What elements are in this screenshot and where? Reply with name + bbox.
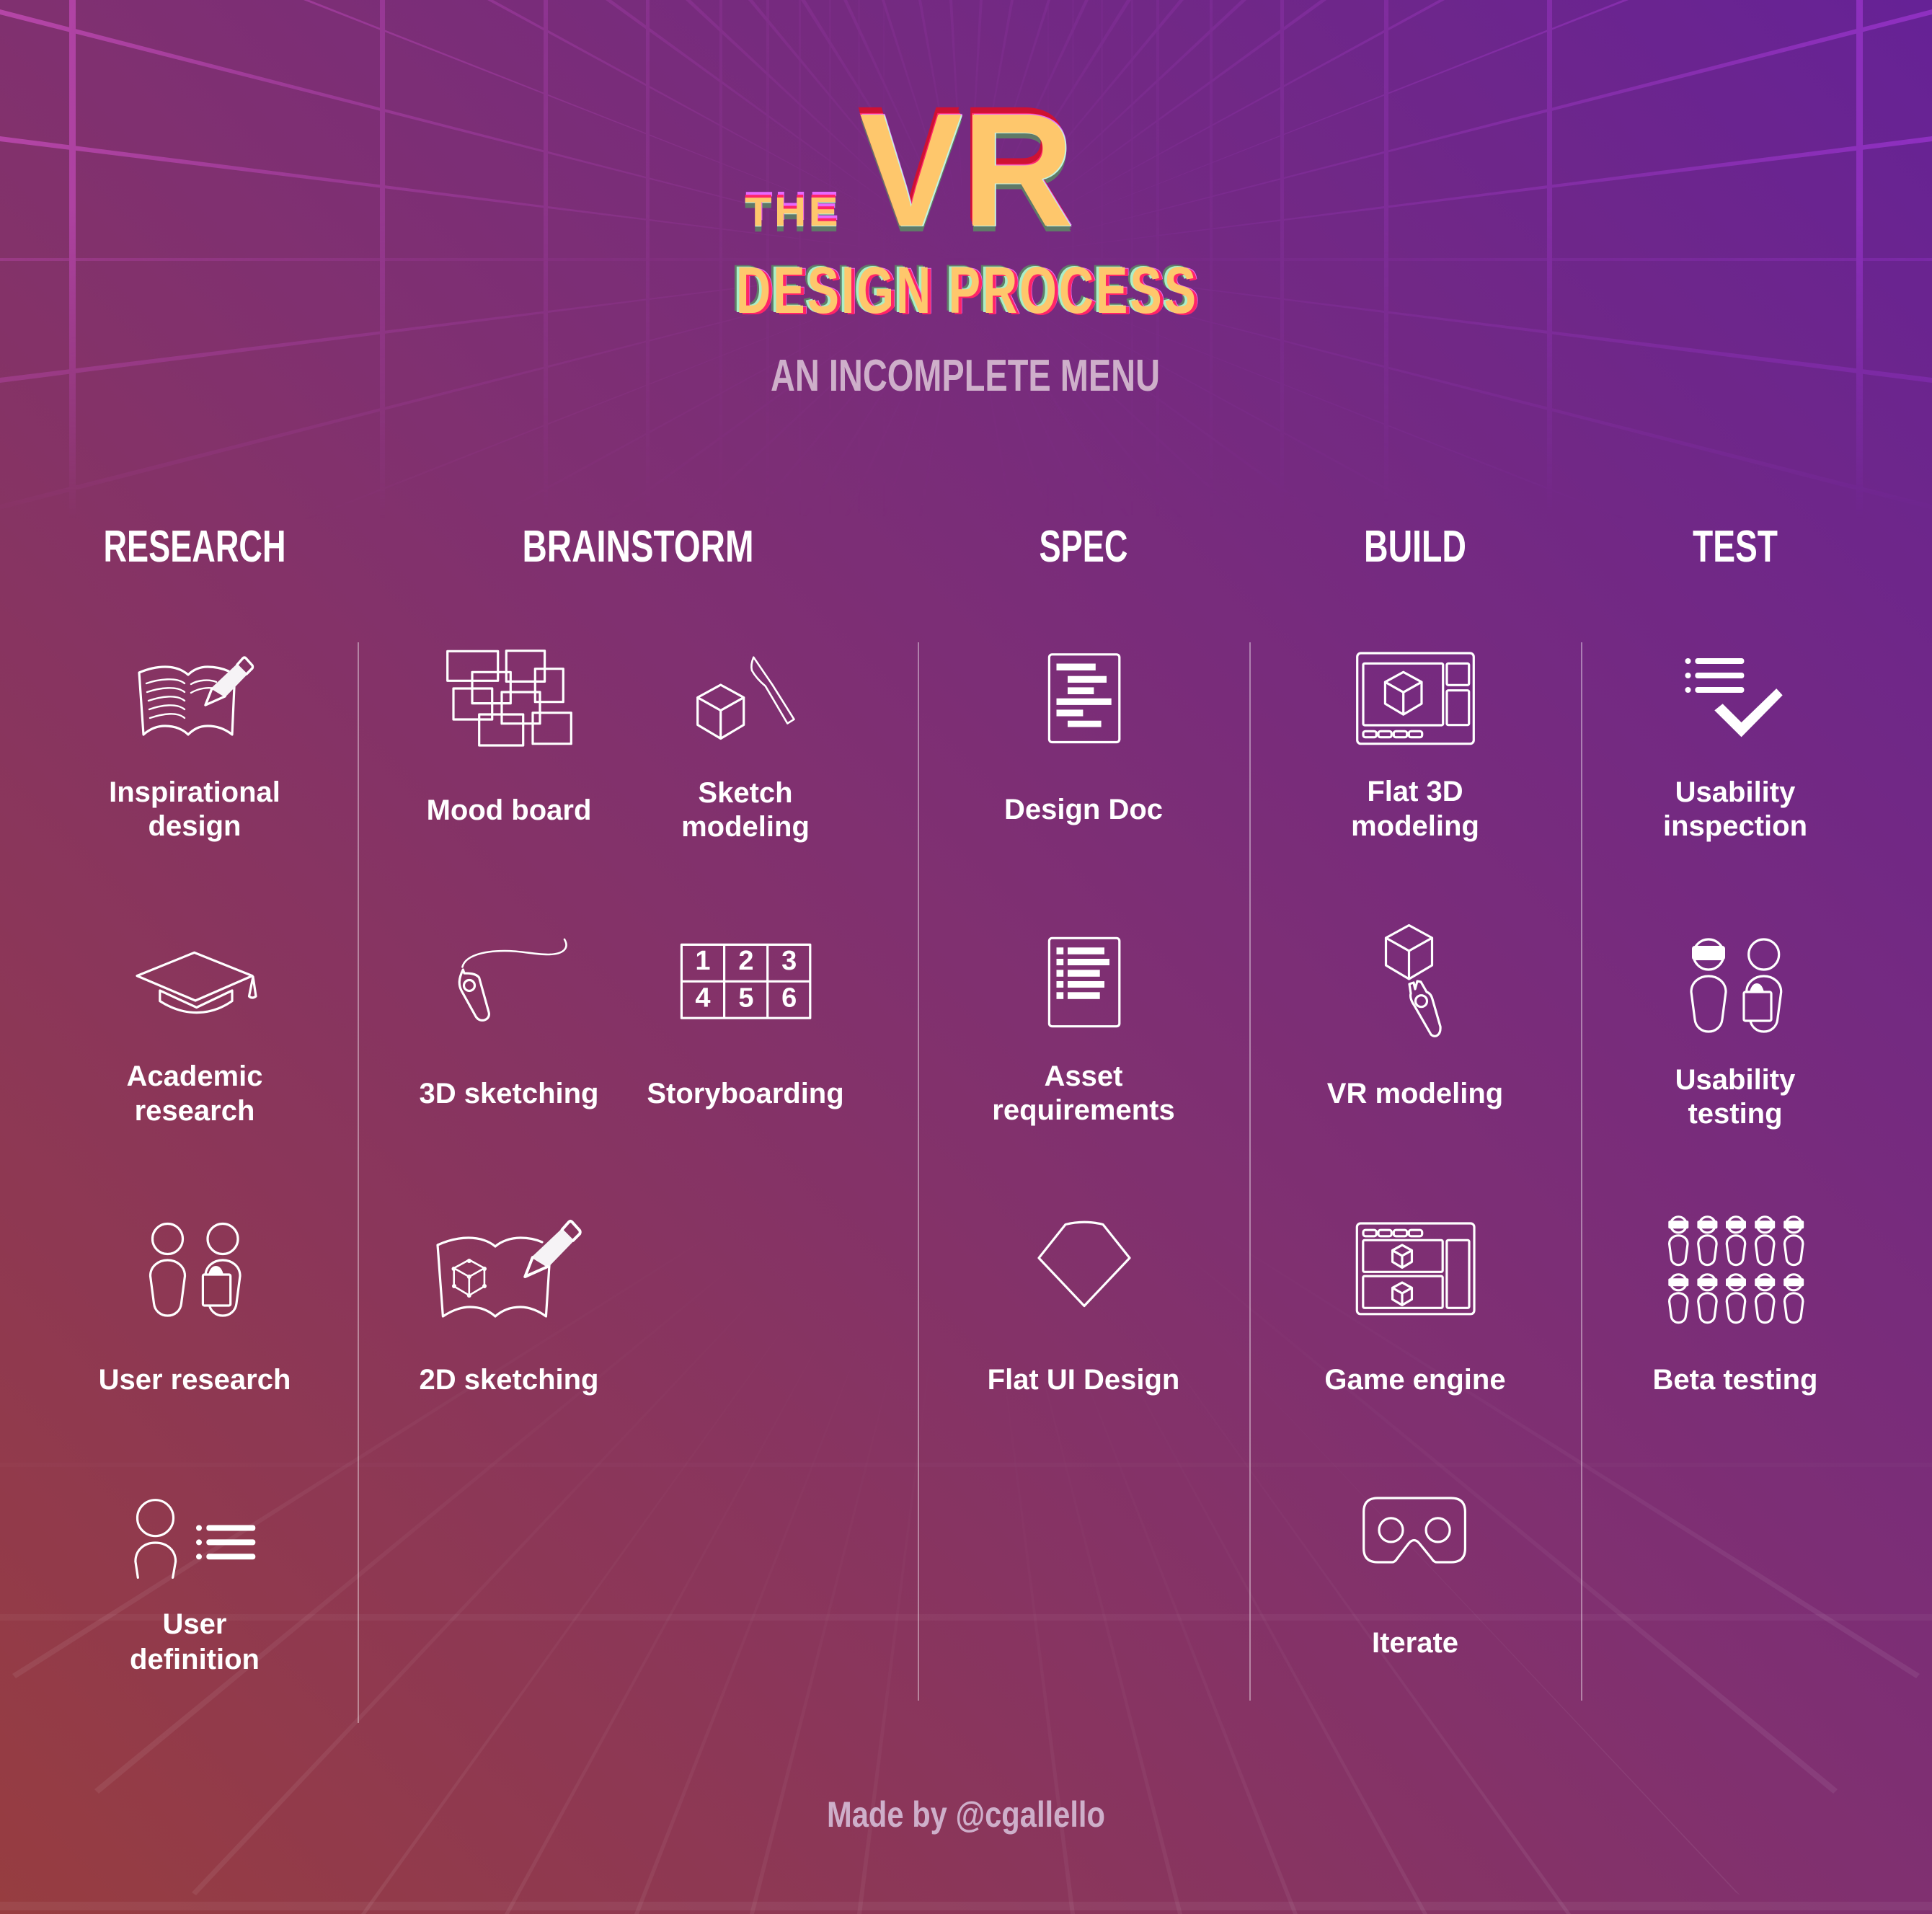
- item: sketch modeling: [681, 657, 810, 843]
- label: 2D sketching: [420, 1364, 598, 1396]
- label: [1675, 1064, 1796, 1130]
- icon: headset user and observer with clipboard: [1691, 939, 1781, 1032]
- column dividers: [358, 642, 1582, 1723]
- icon: game engine window: [1357, 1223, 1474, 1314]
- item: usability testing: [1675, 939, 1796, 1130]
- title line: DESIGN PROCESS: DESIGN PROCESS: [736, 254, 1198, 327]
- label: [127, 1060, 262, 1127]
- panel: research column: [99, 522, 291, 1675]
- heading: research: RESEARCH: [104, 522, 285, 572]
- icon: paper with cube sketch and pencil: [438, 1221, 580, 1316]
- subtitle: AN INCOMPLETE MENU: [771, 351, 1160, 401]
- label: Design Doc: [1004, 794, 1163, 825]
- label: definition: [130, 1644, 260, 1675]
- icon: diamond: [1039, 1222, 1130, 1306]
- item: inspirational design: [109, 657, 280, 842]
- heading: spec: SPEC: [1040, 522, 1127, 572]
- icon: controller drawing a curve: [459, 939, 566, 1020]
- icon: cube and VR controller: [1386, 926, 1440, 1036]
- icon: 3D modeling software window: [1357, 653, 1474, 744]
- label: Usability: [1675, 1064, 1796, 1096]
- label: 3D sketching: [420, 1078, 598, 1109]
- item: 3D sketching: [420, 939, 598, 1109]
- icon: document with text: [1049, 655, 1120, 743]
- icon: ten headset users: [1668, 1217, 1804, 1323]
- label: design: [149, 810, 241, 842]
- label: research: [135, 1095, 254, 1127]
- label: Inspirational: [109, 776, 280, 808]
- icon: six-panel storyboard: 2: [738, 946, 754, 976]
- label: Asset: [1045, 1060, 1122, 1092]
- label: User research: [99, 1364, 291, 1396]
- label: testing: [1688, 1098, 1783, 1130]
- panel: test column: [1653, 522, 1817, 1396]
- item: asset requirements: [992, 938, 1175, 1126]
- item: iterate: [1364, 1498, 1465, 1659]
- icon: user with list: [136, 1500, 255, 1577]
- item: 2D sketching: [420, 1221, 598, 1396]
- label: Mood board: [427, 794, 591, 826]
- icon: document with list: [1049, 938, 1120, 1027]
- label: Sketch: [698, 777, 793, 809]
- item: academic research: [127, 952, 262, 1127]
- label: Flat 3D: [1367, 776, 1463, 807]
- heading: brainstorm: BRAINSTORM: [522, 522, 754, 572]
- heading: build: BUILD: [1364, 522, 1466, 572]
- label: Game engine: [1324, 1364, 1506, 1396]
- label: Storyboarding: [647, 1078, 844, 1109]
- icon: user and researcher with clipboard: [150, 1224, 240, 1316]
- label: Academic: [127, 1060, 262, 1092]
- label: [130, 1608, 260, 1675]
- item: beta testing: [1653, 1217, 1817, 1396]
- item: design doc: [1004, 655, 1163, 825]
- icon: six-panel storyboard: 4: [695, 983, 711, 1014]
- icon: six-panel storyboard: 1: [695, 946, 711, 976]
- icon: overlapping rectangles: [448, 651, 571, 745]
- label: requirements: [992, 1094, 1175, 1126]
- icon: six-panel storyboard: 6: [781, 983, 797, 1014]
- icon: cube and scalpel: [698, 657, 794, 738]
- label: [109, 776, 280, 842]
- label: modeling: [1351, 810, 1479, 842]
- label: User: [163, 1608, 226, 1640]
- label: inspection: [1663, 810, 1807, 842]
- item: user definition: [130, 1500, 260, 1675]
- icon: VR headset: [1364, 1498, 1465, 1562]
- panel: brainstorm column: [420, 522, 844, 1396]
- label: Iterate: [1372, 1627, 1458, 1659]
- label: Usability: [1675, 776, 1796, 808]
- label: [992, 1060, 1175, 1126]
- title word: THE: THE: [745, 189, 841, 235]
- item: game engine: [1324, 1223, 1506, 1396]
- item: user research: [99, 1224, 291, 1396]
- label: [1663, 776, 1807, 842]
- icon: six-panel storyboard: [681, 944, 810, 1018]
- label: [1351, 776, 1479, 842]
- heading: test: TEST: [1693, 522, 1778, 572]
- panel: build column: [1324, 522, 1506, 1659]
- icon: graduation cap: [137, 952, 256, 1013]
- footer credit: Made by @cgallello: [827, 1794, 1105, 1835]
- label: [681, 777, 810, 843]
- label: VR modeling: [1327, 1078, 1503, 1109]
- panel: spec column: [988, 522, 1179, 1396]
- item: VR modeling: [1327, 926, 1503, 1109]
- item: usability inspection: [1663, 658, 1807, 842]
- icon: six-panel storyboard: 3: [781, 946, 797, 976]
- title block: [735, 80, 1198, 327]
- label: Flat UI Design: [988, 1364, 1179, 1396]
- item: storyboarding: [647, 944, 844, 1109]
- item: flat 3D modeling: [1351, 653, 1479, 842]
- item: flat UI design: [988, 1222, 1179, 1396]
- label: modeling: [681, 811, 810, 843]
- label: Beta testing: [1653, 1364, 1817, 1396]
- icon: list and check mark: [1685, 658, 1783, 737]
- icon: open book with pencil: [139, 657, 252, 735]
- icon: six-panel storyboard: 5: [738, 983, 754, 1014]
- title word: VR: VR: [859, 80, 1073, 260]
- item: mood board: [427, 651, 591, 826]
